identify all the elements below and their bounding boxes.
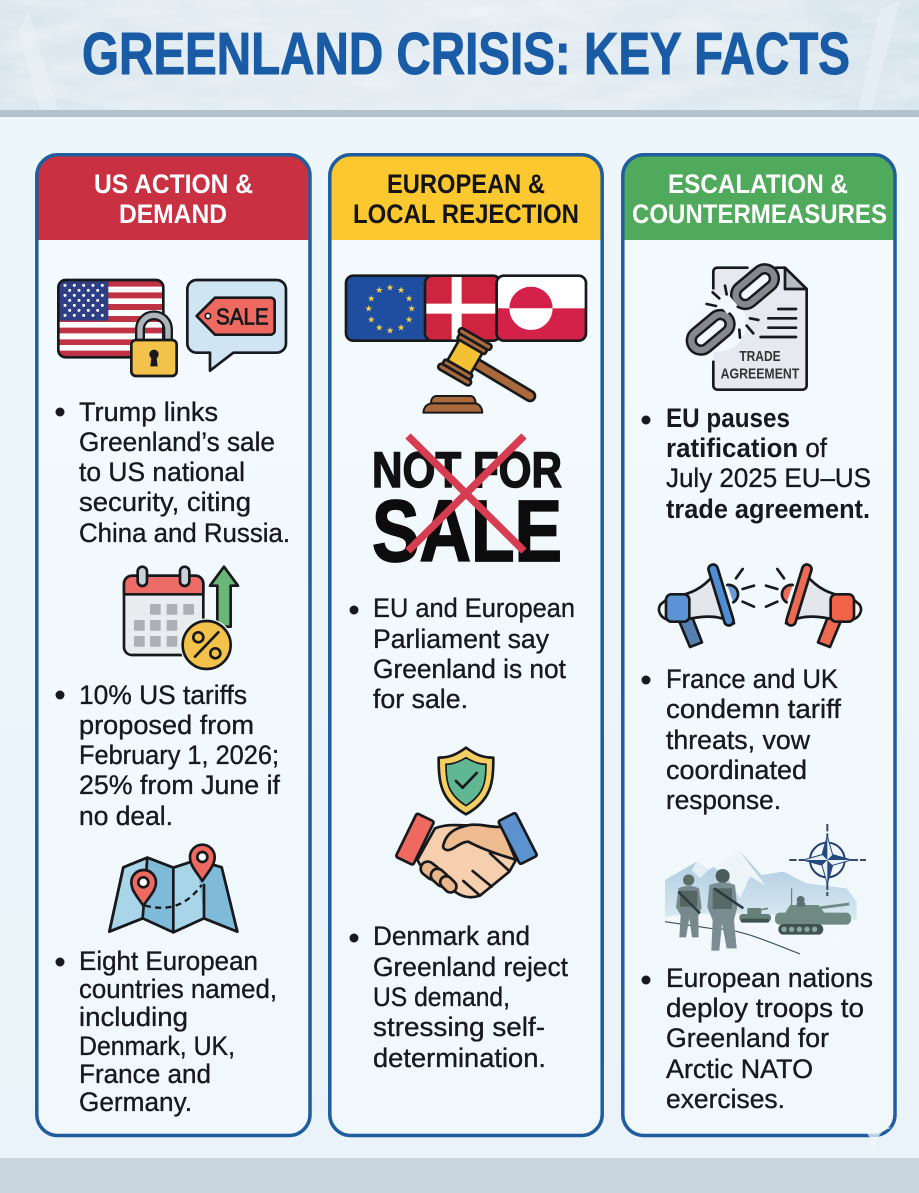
- bullet: eight European countries: Eight European: [79, 946, 258, 976]
- bullet: France and UK condemn: condemn tariff: [666, 694, 842, 724]
- bullet: Trump links sale to security: China and Russia.: [79, 518, 290, 548]
- bullet: EU pauses ratification: [642, 403, 871, 524]
- icon: calendar with percent and up arrow: [124, 567, 238, 672]
- not for sale stamp: [372, 436, 562, 580]
- NATO star: [789, 824, 866, 896]
- small tank: [739, 908, 771, 923]
- icon: EU, Denmark and Greenland flags with gavel: ★: [408, 304, 416, 314]
- icon: EU, Denmark and Greenland flags with gavel: ★: [367, 314, 375, 324]
- panel: escalation and countermeasures: [621, 153, 896, 1136]
- bullet: not for sale statement: Parliament say: [373, 624, 550, 654]
- bullet: eight European countries: including: [79, 1002, 188, 1032]
- bullet: eight European countries: Germany.: [79, 1087, 192, 1117]
- bullet: 10% US tariffs: 10% US tariffs: [79, 680, 247, 710]
- panel header: US action: [36, 153, 311, 240]
- icon: EU, Denmark and Greenland flags with gavel: ★: [397, 285, 405, 295]
- icon: US flag with padlock and sale tag bubble: [58, 280, 286, 376]
- panel: US action and demand: [36, 153, 311, 1136]
- panel header: European rejection: LOCAL REJECTION: [353, 199, 579, 229]
- panel: European and local rejection: [329, 153, 604, 1136]
- large tank: [775, 888, 851, 935]
- icon: EU, Denmark and Greenland flags with gavel: ★: [367, 293, 375, 303]
- bullet: 10% US tariffs: 25% from June if: [79, 770, 281, 800]
- icon: map with location pins: [109, 845, 237, 932]
- icon: US flag with padlock and sale tag bubble: SALE: [216, 304, 269, 330]
- panel header: US action: US ACTION &: [94, 169, 253, 199]
- bullet: Denmark and Greenland reject: Greenland reject: [373, 952, 569, 982]
- icon: EU, Denmark and Greenland flags with gavel: [346, 276, 586, 413]
- icon: EU, Denmark and Greenland flags with gavel: ★: [386, 325, 394, 335]
- icon: EU, Denmark and Greenland flags with gavel: ★: [397, 323, 405, 333]
- bullet: 10% US tariffs: proposed from: [79, 710, 254, 740]
- icon: broken chain on trade agreement: TRADE: [739, 349, 781, 365]
- panel header: European rejection: EUROPEAN &: [387, 169, 545, 199]
- not for sale stamp: SALE: [372, 483, 562, 580]
- soldiers: [676, 869, 743, 951]
- icon: EU, Denmark and Greenland flags with gavel: ★: [386, 282, 394, 292]
- icon: NATO compass, soldiers and tanks: [665, 824, 866, 954]
- bullet: eight European countries: countries named,: [79, 974, 277, 1004]
- not for sale stamp: NOT FOR: [372, 442, 562, 498]
- bullet: EU pauses ratification: EU pauses: [666, 403, 790, 433]
- bullet: Trump links sale to security: [56, 397, 290, 548]
- bullet: not for sale statement: Greenland is not: [373, 654, 567, 684]
- bullet: Trump links sale to security: security, citing: [79, 487, 251, 517]
- icon: broken chain on trade agreement: AGREEMENT: [721, 366, 800, 382]
- bullet: EU pauses ratification: trade agreement.: [666, 494, 870, 524]
- bullet: European nations deploy troops: deploy troops to: [666, 993, 864, 1023]
- bullet: EU pauses ratification: July 2025 EU–US: [666, 463, 871, 493]
- icon: EU, Denmark and Greenland flags with gavel: ★: [375, 323, 383, 333]
- bullet: France and UK condemn: coordinated: [666, 755, 807, 785]
- icon: shield and handshake: [396, 748, 537, 897]
- bullet: France and UK condemn: France and UK: [666, 664, 838, 694]
- icon: EU, Denmark and Greenland flags with gavel: ★: [405, 293, 413, 303]
- bullet: France and UK condemn: response.: [666, 785, 781, 815]
- title band: [0, 0, 919, 117]
- bullet: eight European countries: [56, 946, 277, 1117]
- bullet: 10% US tariffs: no deal.: [79, 801, 173, 831]
- bullet: 10% US tariffs: [56, 680, 281, 831]
- bullet: EU pauses ratification: ratification of: [666, 433, 828, 463]
- icon: EU, Denmark and Greenland flags with gavel: ★: [405, 314, 413, 324]
- panel header: escalation: [621, 153, 896, 240]
- bullet: not for sale statement: for sale.: [373, 684, 468, 714]
- bullet: eight European countries: France and: [79, 1059, 211, 1089]
- gavel: [423, 327, 530, 413]
- bullet: France and UK condemn: [642, 664, 842, 815]
- bullet: European nations deploy troops: exercises.: [666, 1084, 785, 1114]
- bullet: Trump links sale to security: to US national: [79, 457, 245, 487]
- sparkle mark: [856, 1110, 892, 1160]
- panel header: escalation: COUNTERMEASURES: [632, 199, 887, 229]
- bullet: European nations deploy troops: [642, 963, 873, 1114]
- bullet: European nations deploy troops: Arctic NATO: [666, 1054, 813, 1084]
- bullet: France and UK condemn: threats, vow: [666, 725, 811, 755]
- icon: opposing megaphones: [659, 563, 861, 647]
- icon: broken chain on trade agreement: [687, 265, 807, 390]
- bullet: Trump links sale to security: Trump links: [79, 397, 218, 427]
- bullet: eight European countries: Denmark, UK,: [79, 1031, 235, 1061]
- bullet: Denmark and Greenland reject: stressing self-: [373, 1012, 545, 1042]
- icon: EU, Denmark and Greenland flags with gavel: ★: [375, 285, 383, 295]
- panel header: US action: DEMAND: [119, 199, 227, 229]
- bullet: Denmark and Greenland reject: [350, 921, 569, 1073]
- footer band: [0, 1158, 919, 1193]
- bullet: not for sale statement: [350, 593, 575, 714]
- panel header: escalation: ESCALATION &: [668, 169, 848, 199]
- icon: EU, Denmark and Greenland flags with gavel: ★: [365, 304, 373, 314]
- panel header: European rejection: [329, 153, 604, 240]
- bullet: 10% US tariffs: February 1, 2026;: [79, 740, 279, 770]
- bullet: Denmark and Greenland reject: determination.: [373, 1043, 546, 1073]
- bullet: Trump links sale to security: Greenland’s sale: [79, 427, 275, 457]
- bullet: European nations deploy troops: European nations: [666, 963, 873, 993]
- bullet: Denmark and Greenland reject: US demand,: [373, 982, 510, 1012]
- bullet: Denmark and Greenland reject: Denmark and: [373, 921, 530, 951]
- bullet: not for sale statement: EU and European: [373, 593, 575, 623]
- bullet: European nations deploy troops: Greenland for: [666, 1023, 829, 1053]
